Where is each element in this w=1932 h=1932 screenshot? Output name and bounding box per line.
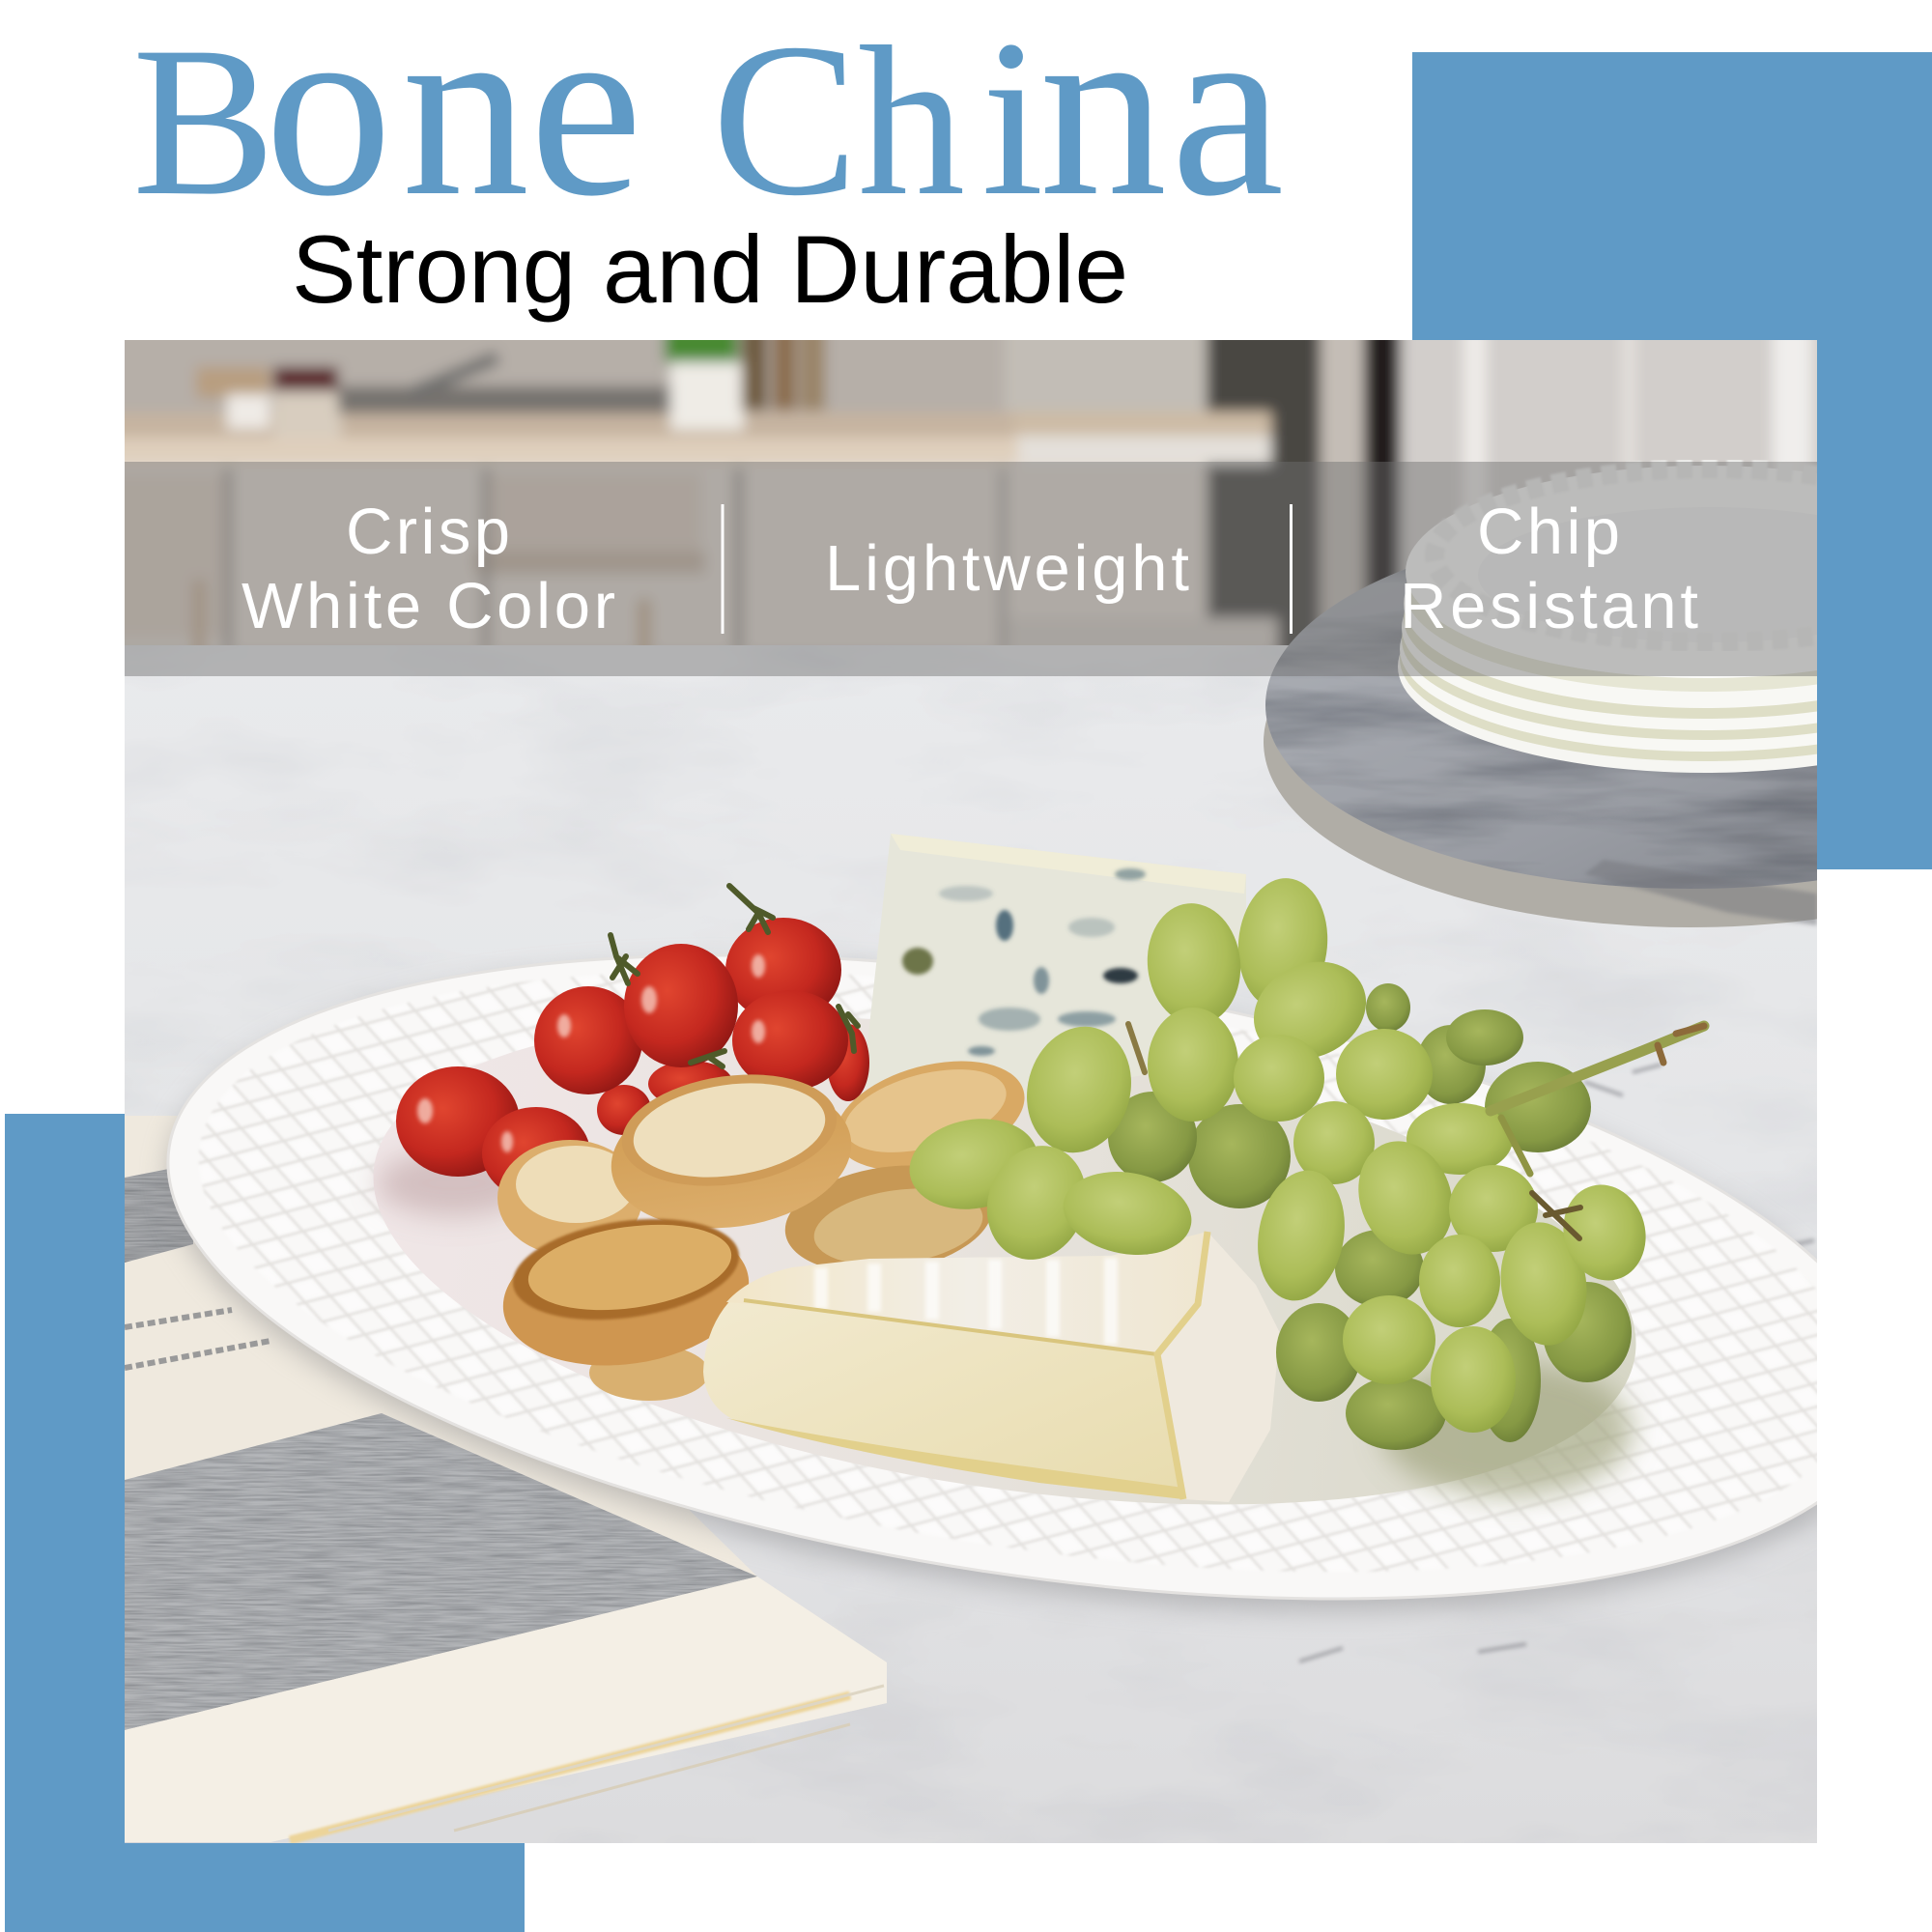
striped linen napkin <box>125 1116 887 1842</box>
title: h <box>858 3 965 241</box>
marble veins <box>1299 1065 1814 1662</box>
stack of white plates <box>1398 460 1817 773</box>
napkin grey stripes <box>125 1413 757 1730</box>
feature: lightweight: Lightweight <box>825 532 1189 605</box>
platter diamond rim <box>199 973 1817 1573</box>
divider right <box>1290 504 1293 634</box>
blue cheese wedge <box>869 834 1246 1059</box>
cabinets and stools <box>125 483 216 629</box>
brie rind side <box>1157 1232 1280 1502</box>
feature: chip resistant: Resistant <box>1400 570 1698 642</box>
brie rind top <box>726 1232 1213 1354</box>
shelf items <box>196 367 270 398</box>
back grapes <box>1108 983 1632 1450</box>
title: i <box>981 0 1043 242</box>
platter well <box>373 1018 1636 1505</box>
feature: crisp white color <box>242 496 615 642</box>
blue accent block: top right <box>1412 52 1932 869</box>
toast left <box>497 1140 642 1256</box>
toast right lower <box>779 1152 999 1286</box>
tomato stems <box>611 886 858 1066</box>
toast under front <box>589 1345 709 1401</box>
title: B <box>132 3 275 241</box>
grape stem <box>1128 1024 1704 1238</box>
cherry tomatoes <box>396 886 869 1200</box>
kitchen background <box>125 340 1817 645</box>
title: C <box>712 0 858 242</box>
oval serving platter <box>156 954 1817 1622</box>
napkin hem <box>126 1577 886 1744</box>
shadows on platter <box>377 1151 1633 1497</box>
subtitle: Strong and Durable <box>292 215 1128 323</box>
brie wedge <box>703 1232 1280 1502</box>
front grapes <box>902 874 1657 1433</box>
feature: chip resistant <box>1400 496 1698 642</box>
panel: product photo <box>106 324 1932 1843</box>
panel: feature band overlay <box>125 462 1817 676</box>
blue accent block: bottom left <box>5 1114 525 1932</box>
toast top centre <box>602 1062 861 1243</box>
green grape cluster <box>902 874 1704 1450</box>
toast front <box>494 1206 758 1380</box>
toasted baguette slices <box>494 1042 1037 1401</box>
feature: crisp white color: White Color <box>242 570 615 642</box>
marble lazy susan <box>1264 569 1817 927</box>
marble countertop <box>125 645 1817 1843</box>
feature: crisp white color: Crisp <box>346 496 510 568</box>
feature: chip resistant: Chip <box>1477 496 1620 568</box>
toast back right <box>824 1042 1037 1189</box>
divider left <box>721 504 724 634</box>
